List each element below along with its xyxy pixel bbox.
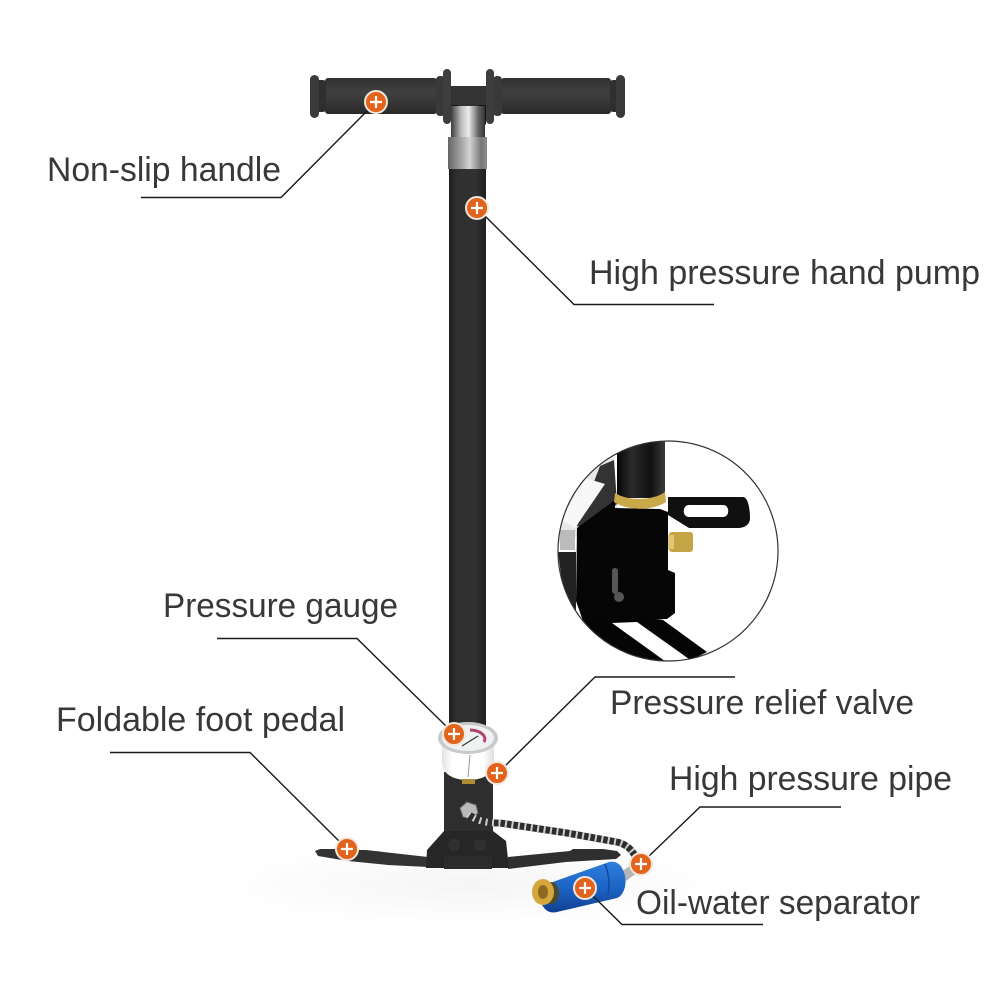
inset detail circle (558, 440, 778, 666)
marker: pipe (630, 853, 652, 875)
callout: pressure gauge: Pressure gauge (163, 587, 398, 625)
flexible hose (468, 814, 635, 856)
callout: non-slip handle (47, 110, 368, 198)
marker: handle (365, 91, 387, 113)
callout: high pressure hand pump (483, 214, 980, 304)
lower body (444, 772, 493, 842)
oil-water separator (532, 862, 626, 912)
callout: high pressure pipe: High pressure pipe (669, 760, 952, 798)
marker: separator (574, 877, 596, 899)
callout: foldable foot pedal: Foldable foot pedal (56, 701, 345, 739)
right grip (486, 69, 625, 124)
pedal base (315, 831, 621, 869)
marker: gauge (443, 723, 465, 745)
callout: oil-water separator: Oil-water separator (636, 884, 920, 922)
floor shadow (210, 843, 730, 927)
marker: relief valve (486, 762, 508, 784)
left grip (310, 69, 451, 124)
callout: non-slip handle: Non-slip handle (47, 151, 281, 189)
callout: pressure gauge (163, 587, 447, 727)
pump illustration (310, 69, 637, 912)
hex fitting (460, 802, 478, 819)
pressure gauge (438, 722, 498, 784)
chrome collar (448, 137, 487, 169)
callout: foldable foot pedal (56, 701, 345, 842)
callout: high pressure hand pump: High pressure hand pump (589, 254, 980, 292)
chrome shaft (451, 106, 485, 138)
handle centre block (451, 86, 486, 106)
marker: pump tube (466, 197, 488, 219)
callout: pressure relief valve (505, 677, 914, 766)
callout: pressure relief valve: Pressure relief valve (610, 684, 914, 722)
marker: foot pedal (336, 838, 358, 860)
callout: high pressure pipe (648, 760, 952, 857)
hotspot markers (336, 91, 652, 899)
separator connector (617, 865, 637, 883)
pump tube (449, 169, 486, 735)
